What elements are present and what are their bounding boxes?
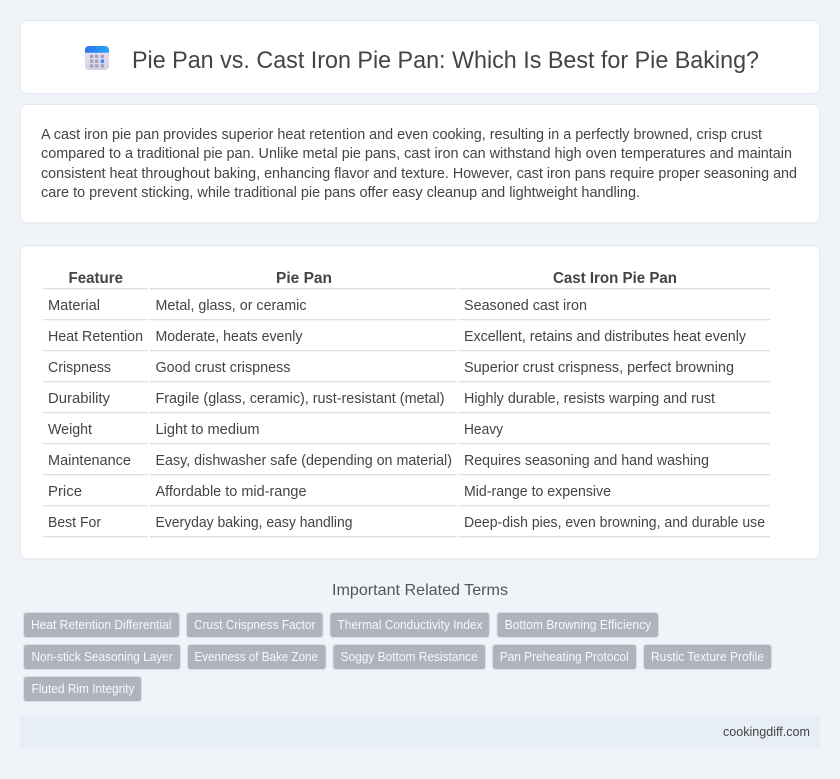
tag: Pan Preheating Protocol [500,650,629,664]
row: durability: Fragile (glass, ceramic), rust-resistant (metal) [156,391,444,407]
icon: calendar [85,46,109,70]
tag [24,644,180,670]
panel: intro text [20,104,820,223]
table header row: Cast Iron Pie Pan [553,270,677,287]
row: heat retention: Heat Retention [48,329,143,345]
intro paragraph: consistent heat throughout baking, enhancing flavor and texture. However, cast iron pans require proper seasoning and [41,166,797,182]
row: heat retention: Moderate, heats evenly [156,329,303,345]
row: best for [48,515,765,531]
tag: Crust Crispness Factor [194,618,316,632]
row: durability: Highly durable, resists warping and rust [464,391,715,407]
row: price [48,484,611,500]
panel: comparison table [20,246,820,559]
tag [492,644,636,670]
row: material: Metal, glass, or ceramic [156,298,306,314]
table header row: Feature [68,270,123,287]
tag: Rustic Texture Profile [651,650,764,664]
footer source: cookingdiff.com [723,725,810,739]
row: heat retention [48,329,747,345]
row: material: Material [48,298,100,314]
tag [24,676,142,702]
row: weight: Heavy [464,422,504,438]
tag: Heat Retention Differential [31,618,172,632]
intro paragraph: compared to a traditional pie pan. Unlike metal pie pans, cast iron can withstand high oven temperatures and maintain [41,146,792,162]
row: heat retention: Excellent, retains and distributes heat evenly [464,329,747,345]
intro paragraph: care to prevent sticking, while traditional pie pans offer easy cleanup and lightweight handling. [41,185,640,201]
row: maintenance: Requires seasoning and hand washing [464,453,709,469]
related terms tags [24,612,772,702]
row: maintenance: Maintenance [48,453,131,469]
tag: Fluted Rim Integrity [32,682,135,696]
row: best for: Deep-dish pies, even browning, and durable use [464,515,765,531]
title: Pie Pan vs. Cast Iron Pie Pan: Which Is Best for Pie Baking? [132,47,759,74]
tag [497,612,658,638]
tag: Non-stick Seasoning Layer [32,650,173,664]
tag: Bottom Browning Efficiency [505,618,652,632]
row: material: Seasoned cast iron [464,298,587,314]
intro paragraph [41,127,797,201]
tag: Thermal Conductivity Index [338,618,483,632]
row: price: Mid-range to expensive [464,484,611,500]
row: weight [48,422,504,438]
panel: header [20,20,820,94]
row: material [48,298,587,314]
row: best for: Best For [48,515,101,531]
intro paragraph: A cast iron pie pan provides superior heat retention and even cooking, resulting in a perfectly browned, crisp crust [41,127,762,143]
row: weight: Weight [48,422,92,438]
heading: related terms: Important Related Terms [332,582,508,599]
row: crispness: Superior crust crispness, perfect browning [464,360,734,376]
tag [644,644,772,670]
row: price: Price [48,484,82,500]
row: crispness [48,360,734,376]
tag [188,644,326,670]
row: crispness: Crispness [48,360,111,376]
tag [330,612,490,638]
row: maintenance [48,453,709,469]
tag [24,612,180,638]
row: weight: Light to medium [156,422,260,438]
footer [20,715,820,749]
row: durability: Durability [48,391,111,407]
row: best for: Everyday baking, easy handling [156,515,353,531]
tag: Evenness of Bake Zone [194,650,318,664]
tag [186,612,323,638]
table header row [68,270,677,287]
row: durability [48,391,715,407]
tag: Soggy Bottom Resistance [340,650,478,664]
table header row: Pie Pan [276,270,332,287]
row: crispness: Good crust crispness [156,360,290,376]
tag [333,644,486,670]
row: maintenance: Easy, dishwasher safe (depending on material) [156,453,452,469]
row: price: Affordable to mid-range [156,484,307,500]
